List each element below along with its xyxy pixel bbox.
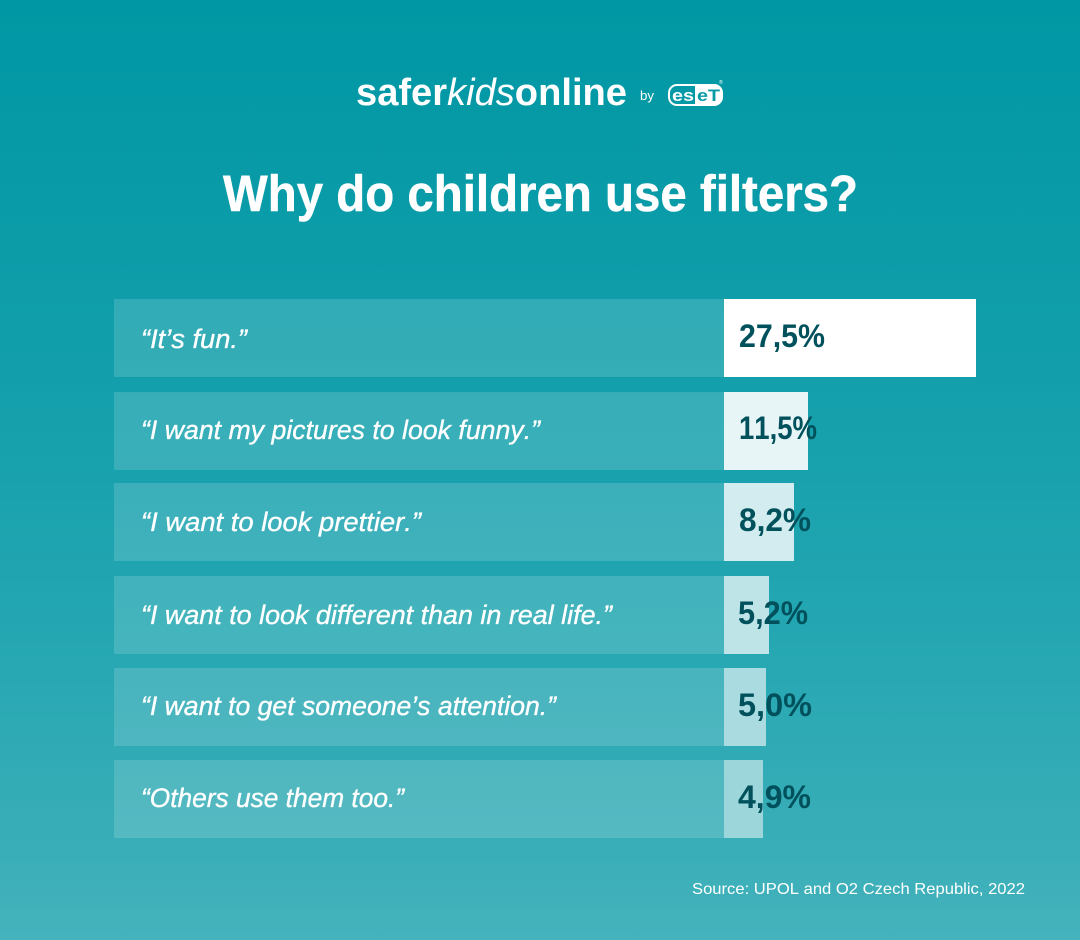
logo: ESET badge: ® <box>719 79 723 86</box>
logo: ESET badge: es <box>672 87 694 105</box>
row: funny pictures: 11,5% <box>739 410 817 446</box>
row: It's fun: “It’s fun.” <box>141 324 248 354</box>
row: funny pictures: “I want my pictures to look funny.” <box>141 415 541 445</box>
row: look prettier <box>114 483 811 561</box>
row: funny pictures <box>114 392 817 470</box>
row: look prettier: “I want to look prettier.” <box>141 507 422 537</box>
logo: ESET badge: eT <box>697 87 720 105</box>
row: others use them <box>114 760 811 838</box>
logo by: by <box>640 89 655 103</box>
bar chart <box>114 299 976 838</box>
row: get attention: “I want to get someone’s attention.” <box>141 691 557 721</box>
row: look different: 5,2% <box>738 595 808 631</box>
logo: ESET badge <box>669 79 723 105</box>
row: It's fun <box>114 299 976 377</box>
title: Why do children use filters? <box>223 165 858 222</box>
row: others use them: “Others use them too.” <box>141 783 405 813</box>
logo: saferkidsonline by ESET <box>356 72 723 114</box>
row: others use them: 4,9% <box>738 779 811 815</box>
row: get attention: 5,0% <box>738 687 812 723</box>
row: It's fun: 27,5% <box>739 318 825 354</box>
logo wordmark: saferkidsonline <box>356 72 627 114</box>
source note: Source: UPOL and O2 Czech Republic, 2022 <box>692 881 1025 898</box>
row: look different <box>114 576 808 654</box>
row: look prettier: 8,2% <box>739 502 811 538</box>
row: get attention <box>114 668 812 746</box>
row: look different: “I want to look different than in real life.” <box>141 600 613 630</box>
